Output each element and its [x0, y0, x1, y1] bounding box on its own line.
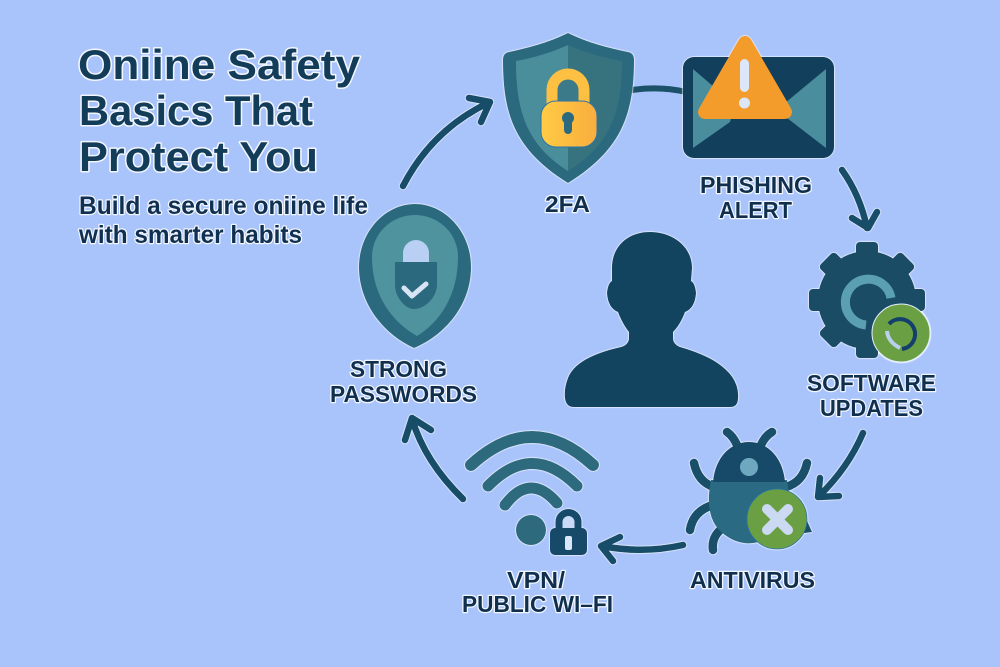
- label: strong passwords: STRONG: [350, 356, 447, 382]
- icon: bug with green cross badge: [690, 432, 812, 550]
- label: VPN public Wi-Fi: [462, 567, 613, 617]
- panel: VPN public Wi-Fi: [462, 437, 613, 617]
- label: strong passwords: [330, 356, 477, 407]
- panel: 2FA: [503, 33, 634, 217]
- icon: central user silhouette: [565, 232, 738, 407]
- label: phishing alert: PHISHING: [700, 172, 812, 198]
- title: [78, 41, 361, 180]
- label: software updates: UPDATES: [820, 395, 923, 421]
- icon: gear with green refresh badge: [809, 242, 930, 362]
- label: 2FA: 2FA: [545, 191, 590, 217]
- label: phishing alert: [700, 172, 812, 223]
- label: VPN public Wi-Fi: VPN/: [507, 567, 566, 593]
- subtitle: Build a secure oniine life: [79, 192, 368, 220]
- subtitle: [78, 192, 368, 249]
- label: phishing alert: ALERT: [719, 197, 792, 223]
- icon: shield with padlock: [503, 33, 634, 183]
- panel: phishing alert: [683, 43, 834, 223]
- label: software updates: [807, 370, 936, 421]
- arrow: phishing to updates: [842, 170, 877, 228]
- title: Oniine Safety: [78, 41, 361, 88]
- arrow: passwords to 2FA: [403, 98, 490, 186]
- subtitle: with smarter habits: [78, 221, 302, 249]
- label: VPN public Wi-Fi: PUBLIC WI–FI: [462, 591, 613, 617]
- panel: strong passwords: [330, 204, 477, 407]
- arrow: VPN to passwords: [405, 418, 463, 499]
- panel: software updates: [807, 242, 936, 421]
- title: Protect You: [79, 133, 318, 180]
- title: Basics That: [79, 87, 313, 134]
- icon: badge shield with lock and check: [359, 204, 471, 348]
- icon: envelope with warning triangle: [683, 43, 834, 158]
- label: strong passwords: PASSWORDS: [330, 381, 477, 407]
- panel: antivirus: [690, 432, 815, 593]
- connector: 2FA to phishing: [632, 88, 686, 92]
- label: software updates: SOFTWARE: [807, 370, 936, 396]
- icon: Wi-Fi arcs with padlock: [471, 437, 593, 555]
- label: antivirus: ANTIVIRUS: [690, 567, 815, 593]
- arrow: antivirus to VPN: [601, 537, 683, 561]
- arrow: updates to antivirus: [818, 433, 863, 497]
